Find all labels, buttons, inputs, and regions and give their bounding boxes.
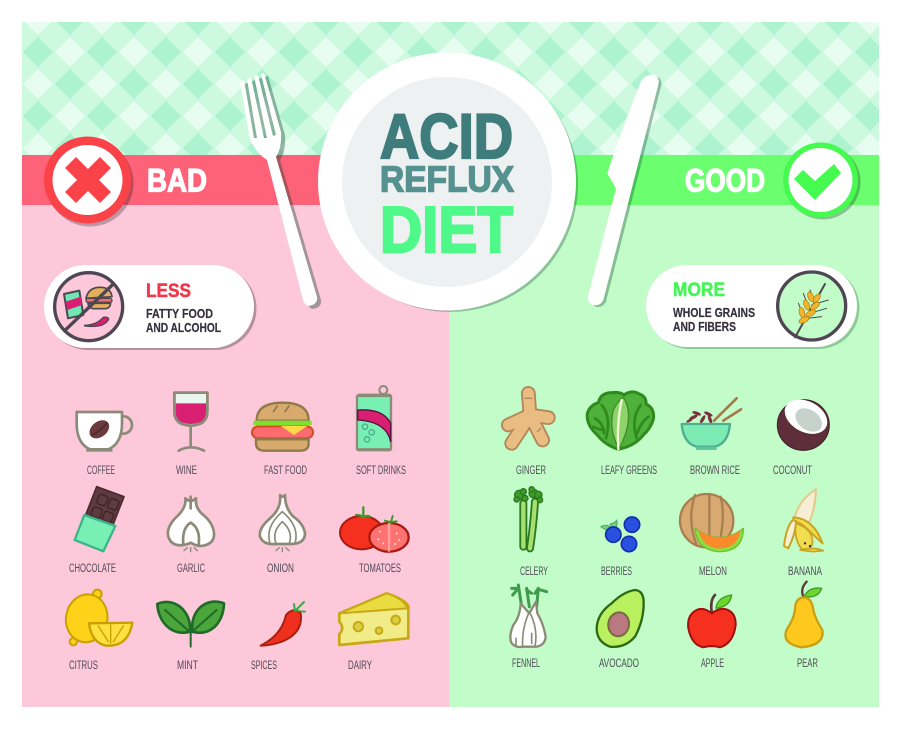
item: soft drinks [356, 386, 406, 477]
text: less [146, 281, 221, 335]
title: acid reflux diet: ACID [380, 102, 513, 172]
item: citrus: CITRUS [69, 660, 98, 672]
callout: less [44, 265, 256, 350]
item: avocado [597, 590, 644, 670]
title: acid reflux diet: DIET [380, 193, 513, 266]
item: leafy greens [587, 392, 657, 477]
plate [318, 52, 578, 312]
item: banana: BANANA [788, 566, 822, 578]
item: mint: MINT [177, 660, 198, 672]
item: spices: SPICES [251, 660, 277, 672]
text: more: MORE [673, 280, 725, 301]
item: melon [680, 494, 743, 578]
text: less: FATTY FOOD [146, 307, 213, 321]
icon: bad cross badge [44, 136, 134, 226]
item: banana [784, 489, 823, 578]
item: dairy [339, 593, 408, 672]
item: mint [157, 602, 224, 672]
band: bad [22, 155, 449, 205]
item: brown rice: BROWN RICE [690, 465, 740, 477]
background: tablecloth [22, 22, 879, 156]
text: less: LESS [146, 281, 191, 302]
text: more: AND FIBERS [673, 320, 736, 334]
food grid: bad foods [62, 386, 409, 672]
item: onion: ONION [267, 563, 294, 575]
item: celery: CELERY [520, 566, 548, 578]
band: good [449, 155, 879, 205]
item: ginger: GINGER [516, 465, 546, 477]
food grid: good foods [508, 392, 833, 670]
item: pear [785, 582, 823, 670]
item: pear: PEAR [797, 658, 818, 670]
item: fennel: FENNEL [512, 658, 540, 670]
heading: good: GOOD [685, 162, 765, 198]
item: garlic: GARLIC [177, 563, 205, 575]
icon: knife [588, 75, 661, 307]
item: soft drinks: SOFT DRINKS [356, 465, 406, 477]
text: more: WHOLE GRAINS [673, 306, 755, 320]
item: ginger [508, 393, 548, 477]
item: berries [601, 517, 640, 578]
item: tomatoes: TOMATOES [359, 563, 401, 575]
item: coconut [773, 392, 833, 477]
panel: bad side [22, 205, 449, 707]
item: onion [260, 495, 305, 575]
item: fast food [252, 403, 313, 477]
panel: good side [449, 205, 879, 707]
item: berries: BERRIES [601, 566, 632, 578]
item: garlic [168, 497, 214, 575]
icon: fork [240, 73, 321, 309]
item: apple [688, 595, 736, 670]
item: fast food: FAST FOOD [264, 465, 307, 477]
item: brown rice [682, 398, 741, 477]
item: apple: APPLE [701, 658, 724, 670]
item: avocado: AVOCADO [599, 658, 639, 670]
item: dairy: DAIRY [348, 660, 372, 672]
item: fennel [510, 585, 547, 670]
item: celery [514, 487, 548, 578]
item: chocolate [69, 487, 124, 575]
item: wine [174, 393, 207, 477]
item: tomatoes [340, 507, 409, 575]
item: spices [251, 602, 305, 672]
item: wine: WINE [176, 465, 197, 477]
callout: more [646, 265, 860, 349]
item: leafy greens: LEAFY GREENS [601, 465, 657, 477]
item: citrus [62, 590, 132, 672]
item: melon: MELON [699, 566, 727, 578]
icon: good check badge [783, 142, 860, 220]
text: less: AND ALCOHOL [146, 321, 221, 335]
icon: whole grain [778, 272, 846, 340]
item: coffee [77, 412, 132, 477]
item: coconut: COCONUT [773, 465, 812, 477]
title: acid reflux diet: REFLUX [380, 158, 514, 200]
icon: no fatty food [55, 273, 123, 341]
text: more [673, 280, 755, 334]
item: coffee: COFFEE [87, 465, 115, 477]
title: acid reflux diet [380, 102, 514, 266]
heading: bad: BAD [147, 162, 207, 198]
item: chocolate: CHOCOLATE [69, 563, 116, 575]
